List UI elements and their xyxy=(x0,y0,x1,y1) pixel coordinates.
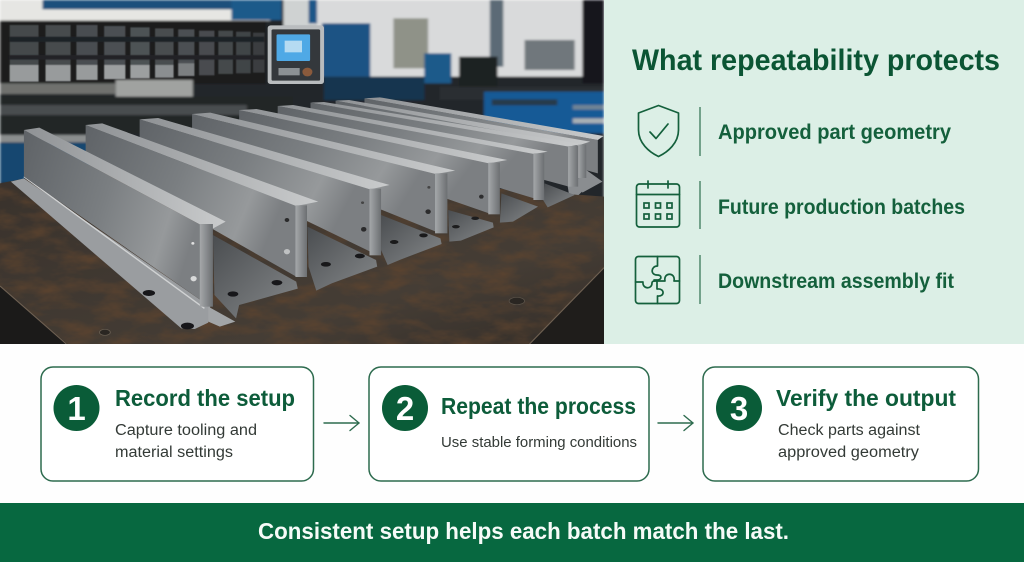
press brake tooling blocks xyxy=(10,25,265,82)
divider xyxy=(699,255,701,304)
factory background xyxy=(0,0,604,344)
control panel xyxy=(268,25,324,84)
step description: Capture tooling and xyxy=(115,422,257,439)
heading: What repeatability protects xyxy=(632,44,1000,77)
icon: shield with check xyxy=(638,106,678,156)
bracket 5 xyxy=(239,109,507,242)
bracket 3 xyxy=(140,118,390,291)
step title: Verify the output xyxy=(776,385,956,411)
panel: what repeatability protects xyxy=(604,0,1024,344)
step card 2: repeat the process xyxy=(369,367,649,481)
footer message: Consistent setup helps each batch match the last. xyxy=(258,518,789,544)
icon: calendar xyxy=(636,181,680,227)
bracket 9 xyxy=(364,97,604,193)
bracket 6 xyxy=(278,105,548,223)
step card 1: record the setup xyxy=(41,367,314,481)
workbench xyxy=(0,166,604,344)
number badge 1: 1 xyxy=(67,390,86,427)
bracket 8 xyxy=(336,100,590,195)
list item: future production batches: Future production batches xyxy=(718,196,965,219)
icon: puzzle xyxy=(636,256,680,304)
photo: formed sheet metal brackets on a workbench xyxy=(0,0,604,344)
step title: Record the setup xyxy=(115,385,295,411)
number badge 2 xyxy=(382,385,428,431)
step description xyxy=(115,422,257,461)
list item: downstream assembly fit: Downstream assembly fit xyxy=(718,270,954,293)
footer banner xyxy=(0,503,1024,562)
list item: approved part geometry: Approved part geometry xyxy=(718,121,951,144)
number badge 3: 3 xyxy=(730,390,748,427)
step title: Repeat the process xyxy=(441,393,636,419)
bracket 4 xyxy=(192,113,455,265)
bracket 7 xyxy=(310,102,580,207)
step description: material settings xyxy=(115,444,233,461)
arrow xyxy=(324,416,359,430)
step description: Use stable forming conditions xyxy=(441,435,637,451)
arrow xyxy=(658,416,693,430)
step description: Check parts against xyxy=(778,422,921,439)
step description xyxy=(778,422,921,461)
step description: approved geometry xyxy=(778,444,919,461)
step card 3: verify the output xyxy=(703,367,978,481)
bracket 1 xyxy=(11,128,235,329)
divider xyxy=(699,181,701,229)
divider xyxy=(699,107,701,156)
number badge 3 xyxy=(716,385,762,431)
number badge 1 xyxy=(54,385,100,431)
number badge 2: 2 xyxy=(396,390,414,427)
bracket 2 xyxy=(86,123,318,318)
